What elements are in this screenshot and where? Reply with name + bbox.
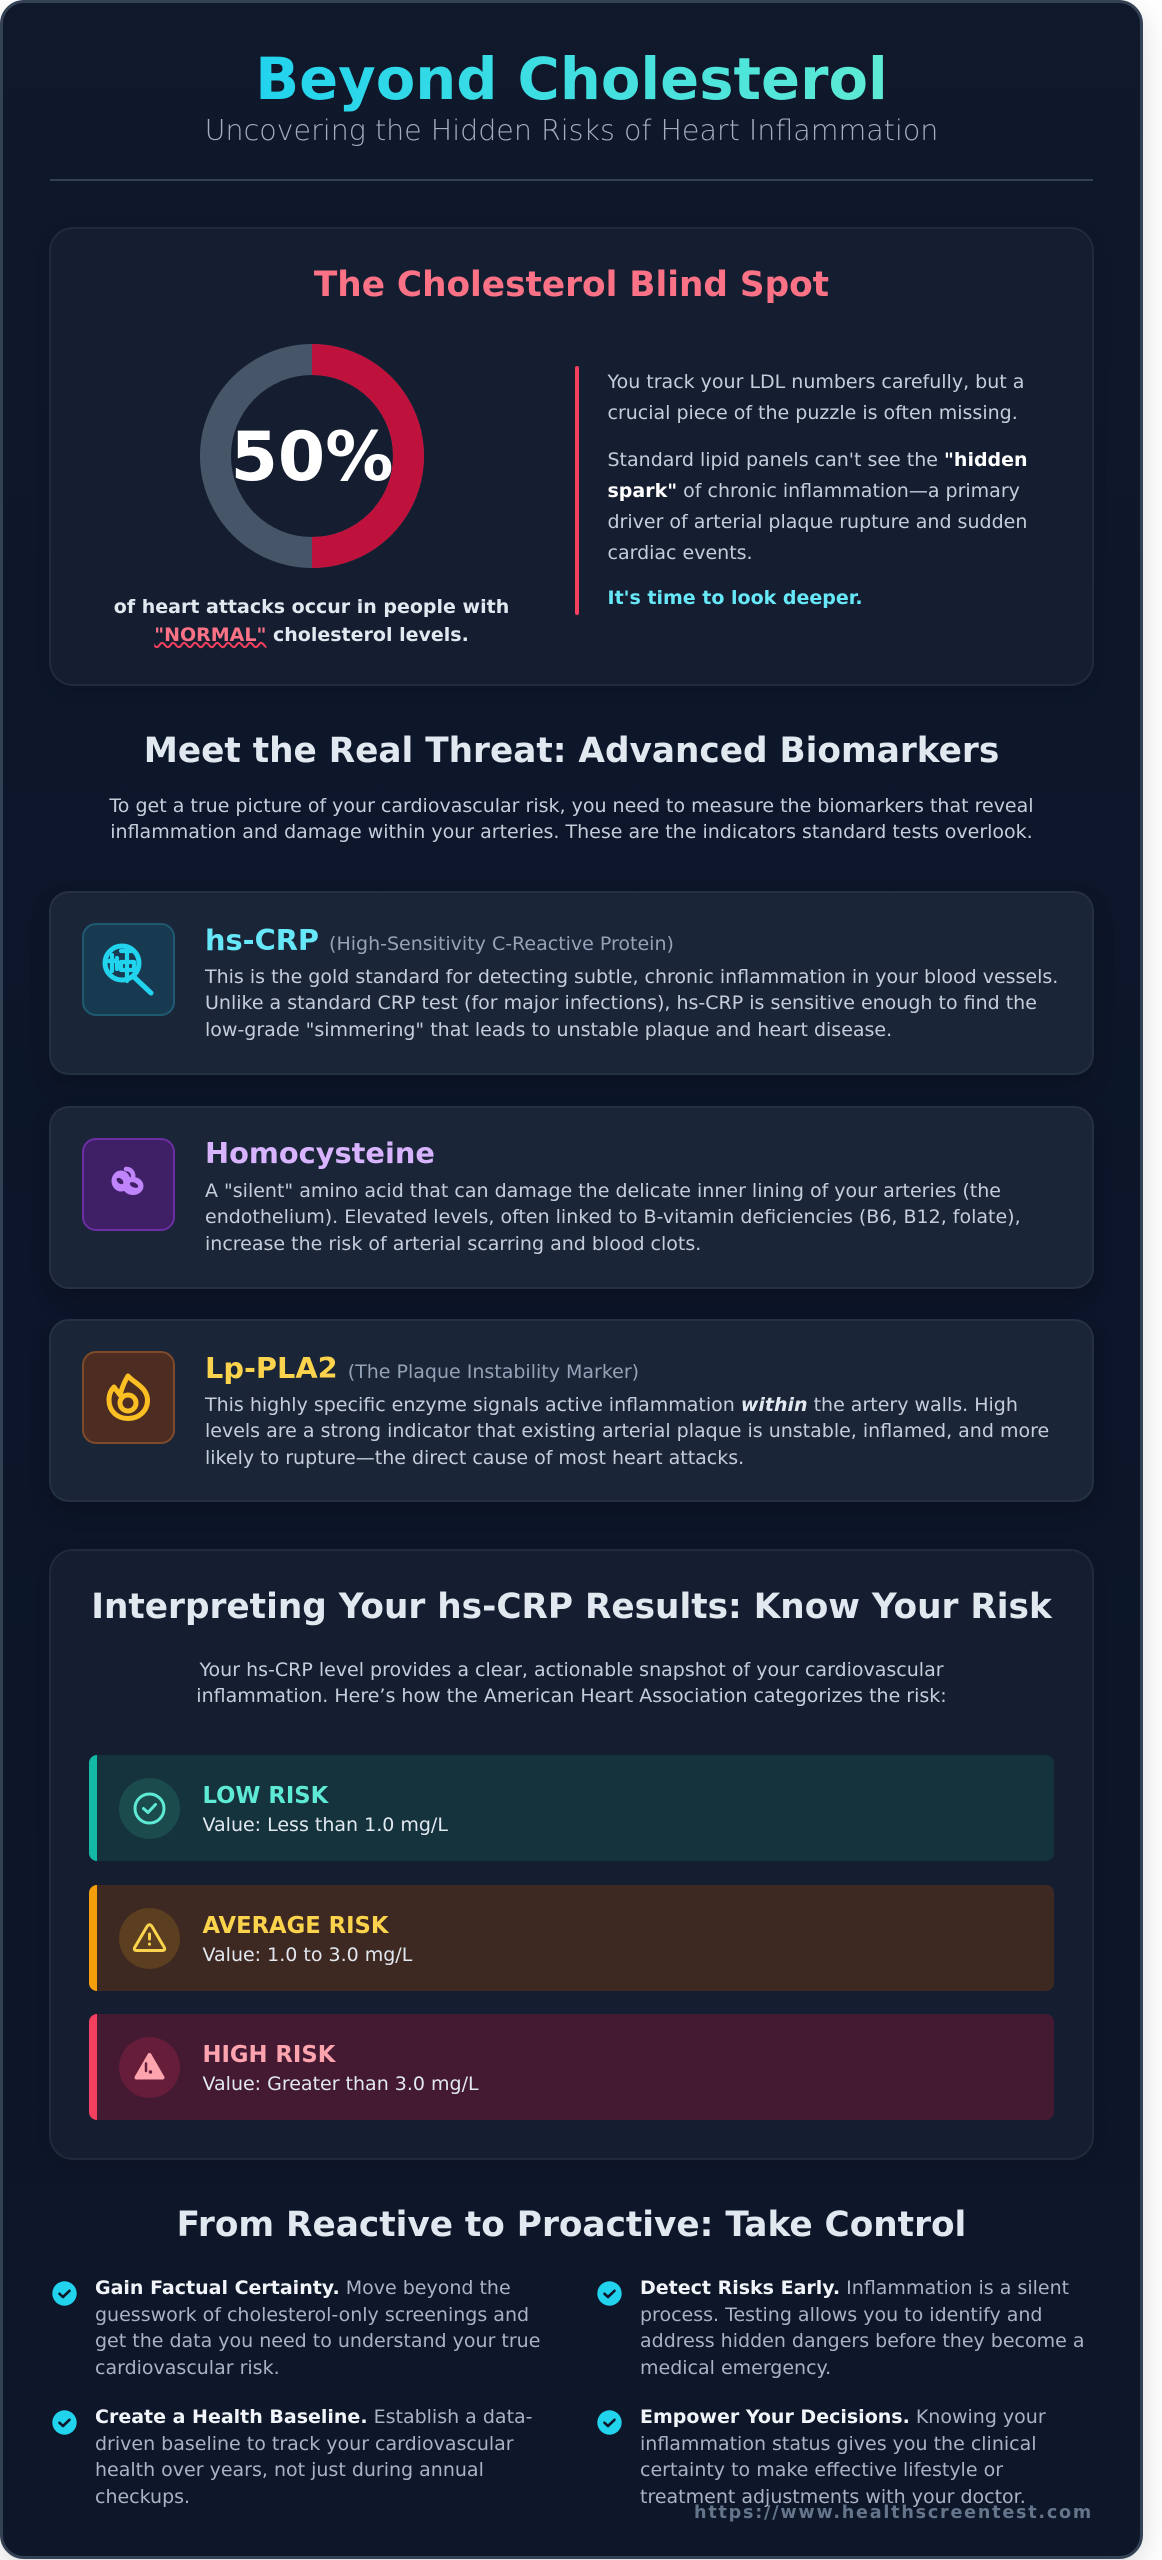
panel: interpreting hs-CRP	[49, 1549, 1094, 2160]
text: health baseline: checkups.	[95, 2486, 190, 2508]
icon: molecule	[82, 1138, 175, 1231]
text: health baseline: health over years, not just during annual	[95, 2459, 484, 2481]
risk row: average	[88, 1884, 1054, 1990]
title: Beyond Cholesterol	[255, 46, 888, 113]
text: factual certainty: get the data you need to understand your true	[95, 2330, 540, 2352]
value: low risk: Value: Less than 1.0 mg/L	[202, 1814, 448, 1836]
value: high risk: Value: Greater than 3.0 mg/L	[202, 2073, 479, 2095]
explanatory text: You track your LDL numbers carefully, but a	[608, 371, 1024, 393]
panel: cholesterol blind spot	[49, 227, 1094, 686]
text: factual certainty: Gain Factual Certainty. Move beyond the	[95, 2277, 511, 2299]
description: Lp-PLA2: levels are a strong indicator that existing arterial plaque is unstable, inflamed, and more	[205, 1420, 1049, 1442]
stat caption	[114, 596, 509, 648]
card: hs-CRP	[49, 891, 1094, 1075]
benefit: factual certainty	[52, 2277, 540, 2379]
description: Homocysteine	[205, 1180, 1021, 1255]
donut chart: 50%	[200, 344, 424, 568]
explanatory text: crucial piece of the puzzle is often missing.	[608, 402, 1018, 424]
interpreting intro: Your hs-CRP level provides a clear, actionable snapshot of your cardiovascular	[199, 1659, 944, 1681]
description: Lp-PLA2: This highly specific enzyme signals active inflammation within the artery walls. High	[205, 1394, 1018, 1416]
interpreting intro: inflammation. Here’s how the American Heart Association categorizes the risk:	[196, 1685, 947, 1707]
icon: check circle	[118, 1778, 180, 1839]
text: empower decisions: treatment adjustments with your doctor.	[640, 2486, 1026, 2508]
description: Lp-PLA2: likely to rupture—the direct cause of most heart attacks.	[205, 1447, 744, 1469]
explanatory text	[608, 371, 1024, 424]
biomarkers intro	[109, 795, 1034, 843]
text: empower decisions: certainty to make effective lifestyle or	[640, 2459, 1003, 2481]
icon: magnifier	[82, 923, 175, 1016]
icon: check badge	[52, 2410, 77, 2435]
stat caption: "NORMAL" cholesterol levels.	[154, 624, 469, 646]
icon: check badge	[597, 2281, 622, 2306]
text: factual certainty	[95, 2277, 540, 2379]
text: detect early: address hidden dangers before they become a	[640, 2330, 1084, 2352]
name: hs-CRP: hs-CRP (High-Sensitivity C-Reactive Protein)	[205, 923, 674, 957]
text: health baseline	[95, 2406, 533, 2508]
description: Homocysteine: increase the risk of arterial scarring and blood clots.	[205, 1233, 701, 1255]
vertical divider bar	[574, 366, 578, 615]
heading: take control: From Reactive to Proactive: Take Control	[177, 2205, 966, 2245]
icon: filled warning	[118, 2037, 180, 2098]
explanatory text: hidden spark: driver of arterial plaque rupture and sudden	[608, 511, 1027, 533]
text: empower decisions: Empower Your Decisions. Knowing your	[640, 2406, 1046, 2428]
explanatory text: hidden spark: cardiac events.	[608, 542, 753, 564]
icon: flame	[82, 1351, 175, 1444]
name: Homocysteine: Homocysteine	[205, 1136, 435, 1170]
explanatory text: hidden spark: spark" of chronic inflammation—a primary	[608, 480, 1020, 502]
description: Homocysteine: A "silent" amino acid that can damage the delicate inner lining of your arteries (the	[205, 1180, 1001, 1202]
icon: warning triangle	[118, 1908, 180, 1968]
description: hs-CRP	[204, 966, 1058, 1041]
stat: 50%: 50%	[231, 418, 393, 497]
card: Homocysteine	[49, 1106, 1094, 1289]
subtitle: Uncovering the Hidden Risks of Heart Inflammation	[205, 114, 938, 147]
risk row: low	[88, 1755, 1054, 1861]
interpreting intro	[196, 1659, 947, 1707]
text: detect early	[640, 2277, 1084, 2379]
card: Lp-PLA2	[49, 1319, 1094, 1502]
icon: check badge	[597, 2410, 622, 2435]
label: low risk: LOW RISK	[202, 1783, 328, 1809]
text: health baseline: Create a Health Baseline. Establish a data-	[95, 2406, 533, 2428]
benefit: empower decisions	[597, 2406, 1046, 2508]
text: health baseline: driven baseline to track your cardiovascular	[95, 2433, 514, 2455]
stat caption: of heart attacks occur in people with	[114, 596, 509, 618]
name: Lp-PLA2: Lp-PLA2 (The Plaque Instability Marker)	[205, 1351, 639, 1385]
source url: https://www.healthscreentest.com	[694, 2503, 1093, 2523]
icon: check badge	[52, 2281, 77, 2306]
label: average risk: AVERAGE RISK	[202, 1912, 388, 1938]
text: detect early: medical emergency.	[640, 2357, 831, 2379]
biomarkers intro: inflammation and damage within your arteries. These are the indicators standard tests overlook.	[110, 821, 1033, 843]
label: high risk: HIGH RISK	[202, 2042, 335, 2068]
heading: interpreting results: Interpreting Your hs-CRP Results: Know Your Risk	[91, 1587, 1052, 1627]
benefit: detect early	[597, 2277, 1084, 2379]
risk row: high	[88, 2014, 1054, 2120]
explanatory text: hidden spark	[608, 448, 1028, 564]
description: hs-CRP: This is the gold standard for detecting subtle, chronic inflammation in your blood vessels.	[205, 966, 1058, 988]
description: hs-CRP: low-grade "simmering" that leads to unstable plaque and heart disease.	[205, 1019, 892, 1041]
value: average risk: Value: 1.0 to 3.0 mg/L	[202, 1944, 412, 1966]
explanatory text: hidden spark: Standard lipid panels can't see the "hidden	[608, 448, 1028, 470]
heading: blind spot: The Cholesterol Blind Spot	[314, 265, 829, 305]
heading: biomarkers: Meet the Real Threat: Advanced Biomarkers	[144, 731, 999, 771]
description: hs-CRP: Unlike a standard CRP test (for major infections), hs-CRP is sensitive enough to find the	[205, 992, 1037, 1014]
benefit: health baseline	[52, 2406, 533, 2508]
text: empower decisions	[640, 2406, 1046, 2508]
description: Homocysteine: endothelium). Elevated levels, often linked to B-vitamin deficiencies (B6, B12, folate),	[205, 1206, 1021, 1228]
biomarkers intro: To get a true picture of your cardiovascular risk, you need to measure the biomarkers that reveal	[109, 795, 1034, 817]
text: empower decisions: inflammation status gives you the clinical	[640, 2433, 1037, 2455]
text: factual certainty: guesswork of cholesterol-only screenings and	[95, 2304, 529, 2326]
description: Lp-PLA2	[204, 1394, 1049, 1469]
text: detect early: Detect Risks Early. Inflammation is a silent	[640, 2277, 1069, 2299]
text: factual certainty: cardiovascular risk.	[95, 2357, 280, 2379]
text: detect early: process. Testing allows you to identify and	[640, 2304, 1042, 2326]
call to action: look deeper: It's time to look deeper.	[608, 587, 863, 609]
